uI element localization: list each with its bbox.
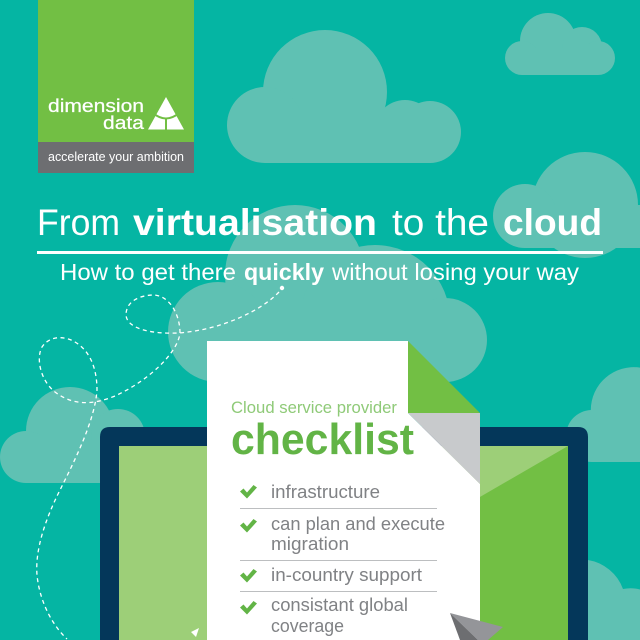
checklist items: migration xyxy=(271,533,349,554)
small white arrow tip of flight path xyxy=(191,628,199,637)
laptop screen xyxy=(119,446,568,640)
checklist items: infrastructure xyxy=(271,481,380,502)
document heading: checklist xyxy=(231,415,414,464)
checklist document xyxy=(207,341,480,640)
cloud: centre behind document xyxy=(168,205,487,395)
title rule xyxy=(37,251,603,254)
logo block xyxy=(38,0,194,173)
screen highlight xyxy=(119,446,568,640)
paper plane xyxy=(450,613,503,640)
title: cloud xyxy=(503,202,602,243)
checklist items: in-country support xyxy=(271,564,422,585)
logo tagline: accelerate your ambition xyxy=(48,150,184,164)
logo wordmark xyxy=(48,96,145,133)
cloud: top right xyxy=(505,13,615,75)
folded corner: green xyxy=(408,341,480,413)
checklist dividers xyxy=(240,508,437,592)
laptop frame xyxy=(100,427,588,640)
subtitle xyxy=(60,259,580,285)
title: virtualisation xyxy=(133,202,377,243)
cloud: right of title xyxy=(493,152,640,258)
title xyxy=(37,202,602,243)
title: From xyxy=(37,202,120,243)
cloud: top centre xyxy=(227,30,461,163)
checklist items xyxy=(271,481,445,636)
cloud: left xyxy=(0,387,145,483)
folded corner: grey xyxy=(408,413,480,484)
subtitle: without losing your way xyxy=(331,259,580,285)
start dot of flight path xyxy=(280,286,284,290)
checklist items: can plan and execute xyxy=(271,513,445,534)
logo wordmark: dimension xyxy=(48,96,144,116)
check marks xyxy=(240,485,257,614)
cloud: bottom right xyxy=(588,560,640,640)
logo wordmark: data xyxy=(103,113,145,133)
subtitle: How to get there xyxy=(60,259,236,285)
logo triangle icon xyxy=(148,97,184,131)
document subtitle: Cloud service provider xyxy=(231,398,397,417)
checklist items: consistant global xyxy=(271,594,408,615)
laptop xyxy=(100,427,588,640)
checklist items: coverage xyxy=(271,615,344,636)
title: to the xyxy=(392,202,489,243)
subtitle: quickly xyxy=(244,259,324,285)
cloud: right middle xyxy=(566,367,640,462)
dashed flight path xyxy=(37,292,279,639)
